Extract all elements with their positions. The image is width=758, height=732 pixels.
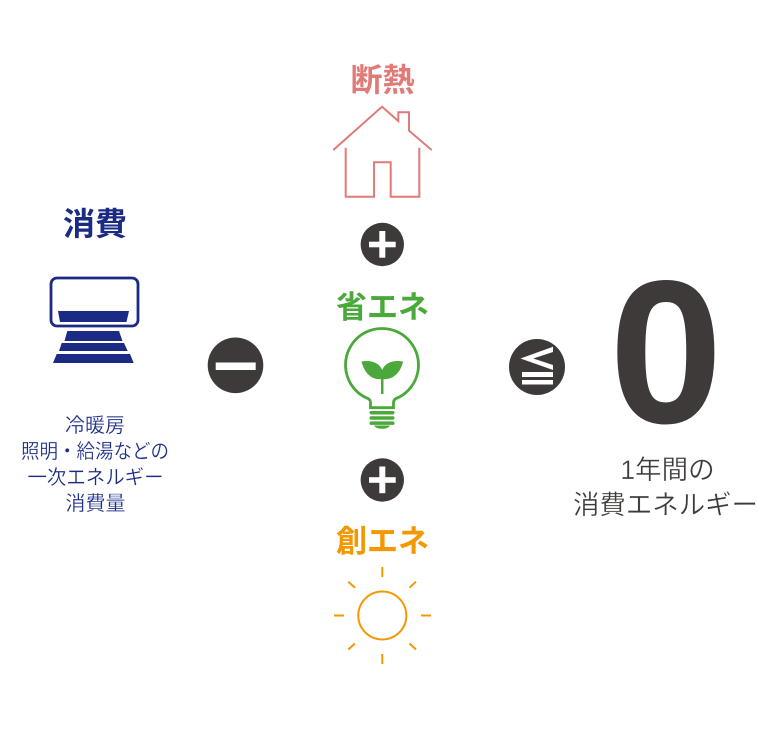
icon: minus operator (208, 338, 263, 393)
icon: less-than-or-equal operator (509, 339, 565, 395)
text: consumption description: 消費量 (66, 492, 126, 515)
text: consumption description: 一次エネルギー (28, 466, 164, 489)
panel: insulation (333, 62, 432, 197)
icon: house (333, 107, 432, 197)
icon: plus operator bottom (361, 458, 404, 502)
icon: plus operator top (361, 223, 404, 266)
heading: consumption: 消費 (63, 206, 127, 242)
text: annual consumption: 消費エネルギー (573, 490, 758, 520)
heading: insulation: 断熱 (350, 62, 415, 98)
panel: result (573, 238, 758, 520)
text: consumption description (21, 414, 169, 515)
panel: energy saving (336, 290, 429, 429)
icon: light bulb with sprout (346, 328, 418, 429)
big zero: 0 (609, 238, 723, 466)
panel: consumption (21, 206, 169, 515)
panel: energy creation (334, 524, 431, 664)
text: annual consumption (573, 455, 758, 520)
heading: energy saving: 省エネ (336, 290, 429, 325)
icon: sun (334, 567, 431, 664)
heading: energy creation: 創エネ (336, 524, 429, 559)
icon: air conditioner (51, 278, 138, 363)
text: annual consumption: 1年間の (620, 455, 715, 485)
text: consumption description: 照明・給湯などの (21, 440, 169, 463)
text: consumption description: 冷暖房 (65, 414, 125, 437)
